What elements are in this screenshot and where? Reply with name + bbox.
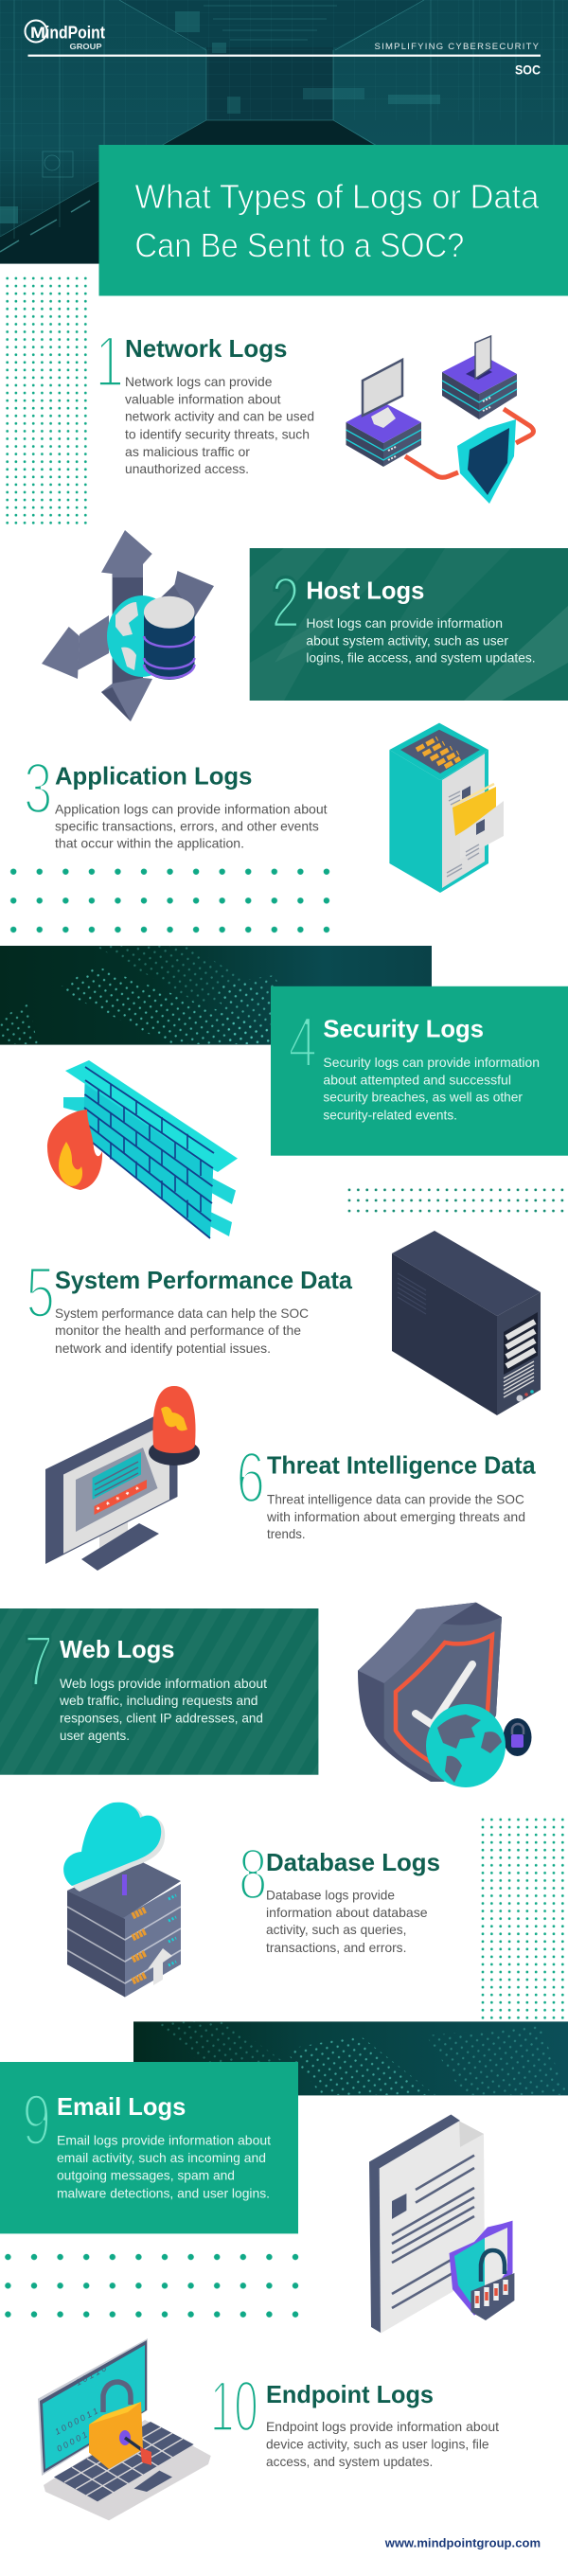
heading: Web Logs	[60, 1635, 174, 1663]
section 10: endpoint logs	[210, 2367, 499, 2469]
header background	[0, 0, 568, 264]
logo: MindPoint Group: indPoint	[45, 23, 105, 42]
body text	[57, 2133, 271, 2200]
body text: to identify security threats, such	[125, 427, 310, 442]
icon: laptop with padlock and key: 1 0 0 0 0 1 1	[53, 2406, 99, 2437]
logo: MindPoint Group: GROUP	[70, 42, 102, 51]
body text: Security logs can provide information	[323, 1055, 540, 1070]
header rule	[28, 55, 541, 57]
body text: unauthorized access.	[125, 461, 249, 476]
number 4: 4	[288, 1003, 317, 1083]
data band 1	[0, 946, 432, 1045]
body text: security breaches, as well as other	[323, 1090, 523, 1105]
body text: System performance data can help the SOC	[55, 1306, 309, 1321]
icon: laptop with padlock and key: 1 0 1 1 0	[74, 2363, 108, 2388]
number 1: 1	[95, 322, 124, 402]
icon: monitor with alarm	[45, 1386, 200, 1571]
body text: as malicious traffic or	[125, 444, 250, 459]
body text: Endpoint logs provide information about	[266, 2419, 499, 2434]
section 3: application logs	[24, 749, 328, 851]
body text: responses, client IP addresses, and	[60, 1710, 263, 1725]
heading: Host Logs	[306, 576, 424, 604]
body text: outgoing messages, spam and	[57, 2168, 235, 2183]
number 5: 5	[27, 1253, 55, 1334]
section 5: system performance data	[27, 1253, 353, 1356]
body text: Application logs can provide information about	[55, 801, 328, 816]
heading: Database Logs	[266, 1848, 440, 1876]
data band 2	[133, 2021, 568, 2095]
icon: server tower	[392, 1231, 541, 1415]
footer url: www.mindpointgroup.com	[384, 2536, 541, 2550]
number 3: 3	[24, 749, 52, 829]
icon: shield with globe and lock	[358, 1603, 532, 1787]
body text: activity, such as queries,	[266, 1922, 406, 1937]
icon: firewall with flame	[47, 1060, 238, 1238]
panel: web logs	[0, 1608, 318, 1775]
panel: email logs	[0, 2062, 298, 2233]
logo: MindPoint Group	[25, 21, 105, 51]
heading: Application Logs	[55, 762, 252, 791]
icon: monitor with alarm: *****	[95, 1484, 142, 1515]
logo: MindPoint Group: M	[30, 24, 45, 42]
icon: laptop with padlock and key	[38, 2338, 211, 2520]
body text: security-related events.	[323, 1108, 457, 1123]
body text: logins, file access, and system updates.	[306, 650, 536, 666]
body text	[266, 1888, 428, 1955]
number 8: 8	[239, 1835, 267, 1915]
body text	[266, 1492, 525, 1541]
heading: Endpoint Logs	[266, 2380, 434, 2408]
body text: Network logs can provide	[125, 374, 273, 389]
body text: access, and system updates.	[266, 2454, 433, 2469]
body text: Database logs provide	[266, 1888, 395, 1903]
icon: laptop with padlock and key: 0 0 0 0 1	[55, 2429, 89, 2454]
body text	[55, 801, 328, 851]
heading: System Performance Data	[55, 1266, 353, 1294]
tagline: SIMPLIFYING CYBERSECURITY	[375, 42, 540, 52]
body text: malware detections, and user logins.	[57, 2185, 270, 2200]
body text: about system activity, such as user	[306, 632, 508, 648]
body text: with information about emerging threats and	[266, 1509, 525, 1524]
dot rows: left	[0, 2242, 309, 2328]
body text: Web logs provide information about	[60, 1676, 267, 1691]
icon: file cabinet	[389, 723, 504, 893]
body text	[266, 2419, 499, 2469]
section tag: SOC: SOC	[515, 63, 541, 78]
body text: information about database	[266, 1905, 428, 1920]
heading: Email Logs	[57, 2092, 186, 2121]
body text: email activity, such as incoming and	[57, 2150, 266, 2165]
body text: trends.	[267, 1526, 306, 1541]
body text: user agents.	[60, 1728, 130, 1743]
dot rows: right	[345, 1186, 568, 1217]
body text: monitor the health and performance of the	[55, 1323, 301, 1338]
body text: that occur within the application.	[55, 836, 244, 851]
body text: network and identify potential issues.	[55, 1341, 271, 1356]
body text	[59, 1676, 267, 1743]
section 6: threat intelligence data	[237, 1438, 536, 1541]
number 6: 6	[237, 1438, 265, 1519]
icon: networked servers and shield	[346, 336, 534, 504]
heading: Network Logs	[125, 334, 288, 363]
dot grid: left column	[3, 275, 90, 526]
body text: web traffic, including requests and	[59, 1693, 257, 1708]
body text: network activity and can be used	[125, 409, 314, 424]
icon: document with shield and padlock	[369, 2115, 514, 2334]
body text: Threat intelligence data can provide the SOC	[267, 1492, 524, 1507]
dot row: left	[0, 857, 339, 943]
panel: host logs	[250, 548, 568, 701]
body text: transactions, and errors.	[266, 1940, 406, 1955]
title: What Types of Logs or Data	[134, 177, 540, 216]
body text: Email logs provide information about	[57, 2133, 271, 2148]
section 8: database logs	[239, 1835, 440, 1955]
heading: Security Logs	[323, 1015, 484, 1043]
body text: specific transactions, errors, and other events	[55, 818, 319, 833]
number 10: 10	[210, 2367, 258, 2447]
number 9: 9	[23, 2081, 51, 2161]
icon: cloud over server stack	[63, 1803, 181, 1998]
body text	[55, 1306, 309, 1356]
number 2: 2	[271, 563, 300, 644]
title: Can Be Sent to a SOC?	[134, 225, 464, 265]
number 7: 7	[25, 1622, 53, 1702]
title	[134, 177, 540, 265]
title panel	[98, 145, 568, 295]
body text: about attempted and successful	[323, 1073, 511, 1088]
section 1: network logs	[95, 322, 314, 476]
body text: device activity, such as user logins, file	[266, 2437, 489, 2452]
body text	[306, 615, 536, 666]
body text: Host logs can provide information	[306, 615, 503, 631]
dot grid: right column	[478, 1816, 568, 2021]
panel: security logs	[271, 986, 568, 1156]
body text	[125, 374, 314, 476]
body text: valuable information about	[125, 391, 281, 406]
body text	[323, 1055, 540, 1123]
heading: Threat Intelligence Data	[267, 1450, 536, 1479]
icon: arrows, globe and database	[42, 530, 214, 721]
